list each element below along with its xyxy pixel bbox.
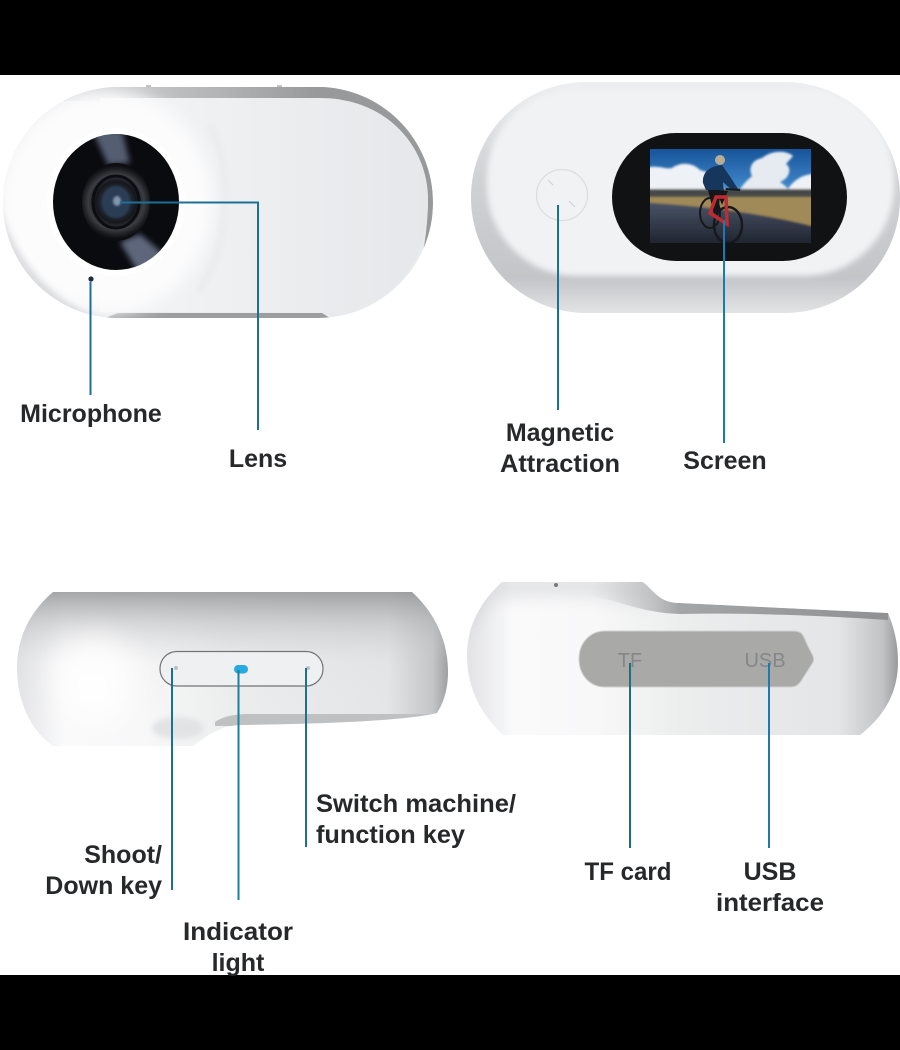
leader line: function key [305,668,307,847]
label: Lens: Lens [229,445,287,473]
label: Magnetic Attraction [500,419,620,478]
leader line: indicator light [238,670,240,900]
leader line: shoot key [171,668,173,890]
label: Magnetic Attraction: Magnetic [506,419,614,447]
screen photo of cyclist [650,149,811,243]
leader line: USB [768,663,770,848]
leader line: TF card [629,663,631,848]
label: USB interface [716,858,824,917]
port cover plate: USB [744,650,786,672]
leader line: magnetic attraction [557,205,559,410]
label: Indicator light [183,918,293,977]
cyclist [700,155,742,243]
label: Indicator light: light [212,949,265,977]
screen [612,133,847,261]
label: Shoot / Down key: Down key [45,872,162,900]
microphone hole [88,276,94,282]
lens [53,134,179,270]
label: USB interface: interface [716,889,824,917]
label: Indicator light: Indicator [183,918,293,946]
leader line: microphone [90,282,92,395]
label: TF card: TF card [584,858,672,886]
leader line: lens [120,202,258,430]
camera front view [0,80,433,325]
function button dot [306,666,310,670]
camera bottom side view with buttons [17,592,448,746]
indicator light [234,665,248,674]
label: Screen: Screen [683,447,767,475]
camera back view [471,82,900,313]
button panel [160,652,323,686]
label: Microphone: Microphone [20,400,162,428]
top black band [0,0,900,75]
label: Switch machine / function key: Switch machine/ [316,790,516,818]
bottom black band [0,975,900,1050]
label: Magnetic Attraction: Attraction [500,450,620,478]
label: Switch machine / function key: function key [316,821,465,849]
label: Shoot / Down key [45,841,162,900]
label: Switch machine / function key [316,790,516,849]
label: USB interface: USB [744,858,796,886]
magnetic attraction circle [536,170,588,220]
camera top side view with ports [467,582,898,735]
port cover plate: TF [618,650,642,672]
shoot button dot [174,666,178,670]
leader line: screen [723,220,725,443]
label: Shoot / Down key: Shoot/ [84,841,162,869]
port cover plate [579,631,814,687]
